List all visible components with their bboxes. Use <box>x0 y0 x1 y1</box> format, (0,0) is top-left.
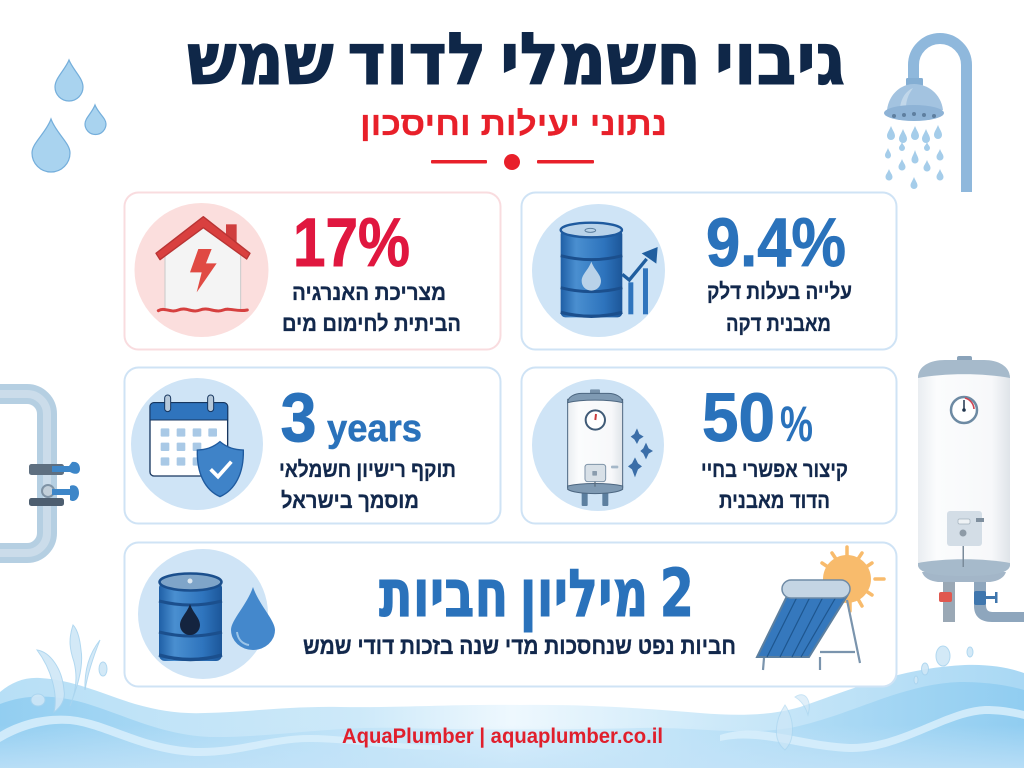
stat: 2 million barrels: 2 מיליון חביות <box>379 555 694 632</box>
shower head and pipe <box>884 39 966 192</box>
text: license description <box>279 457 456 513</box>
water drops top left <box>32 60 106 172</box>
panel: 50% lifespan <box>522 368 896 524</box>
water splash right <box>776 646 973 750</box>
stat: 3 years: years <box>327 408 422 450</box>
text: lifespan description: הדוד מאבנית <box>719 488 830 513</box>
panel: 2 million barrels <box>124 542 896 686</box>
text: fuel cost description <box>707 279 852 336</box>
water splash left <box>31 625 107 712</box>
stat: 50% <box>702 379 813 456</box>
icon: house with lightning bolt <box>134 203 268 337</box>
text: license description: מוסמך בישראל <box>281 488 419 513</box>
text: energy share description: מצריכת האנרגיה <box>292 280 446 305</box>
stat: 50%: % <box>780 396 813 452</box>
text: energy share description <box>282 280 461 336</box>
divider <box>431 154 594 170</box>
text: fuel cost description: מאבנית דקה <box>726 311 831 336</box>
icon: water heater with sparkles <box>532 379 664 511</box>
background water waves <box>0 665 1024 768</box>
stat: 3 years <box>280 379 422 456</box>
stat: 9.4%: 9.4% <box>706 204 846 281</box>
title: גיבוי חשמלי לדוד שמש <box>187 17 845 101</box>
icon: calendar with shield <box>131 378 263 510</box>
panel: 17% energy share <box>124 192 500 350</box>
text: fuel cost description: עלייה בעלות דלק <box>707 279 852 304</box>
stat: 50%: 50 <box>702 379 775 456</box>
icon: solar water heater <box>757 547 884 670</box>
text: lifespan description: קיצור אפשרי בחיי <box>701 457 848 482</box>
text: barrels description: חביות נפט שנחסכות מדי שנה בזכות דודי שמש <box>303 633 736 660</box>
pipe and valve left <box>0 394 80 553</box>
stat: 17%: 17% <box>293 204 410 281</box>
water heater right <box>918 356 1024 622</box>
icon: oil barrel with rising arrow <box>532 204 665 337</box>
footer: AquaPlumber | aquaplumber.co.il <box>342 725 663 748</box>
text: lifespan description <box>701 457 848 513</box>
icon: oil barrel and drop <box>138 549 275 679</box>
panel: 3 years license <box>124 368 500 524</box>
text: energy share description: הביתית לחימום מים <box>282 311 461 336</box>
panel: 9.4% fuel cost <box>522 192 896 350</box>
text: license description: תוקף רישיון חשמלאי <box>279 457 456 482</box>
stat: 3 years: 3 <box>280 379 316 456</box>
subtitle: נתוני יעילות וחיסכון <box>360 105 667 142</box>
